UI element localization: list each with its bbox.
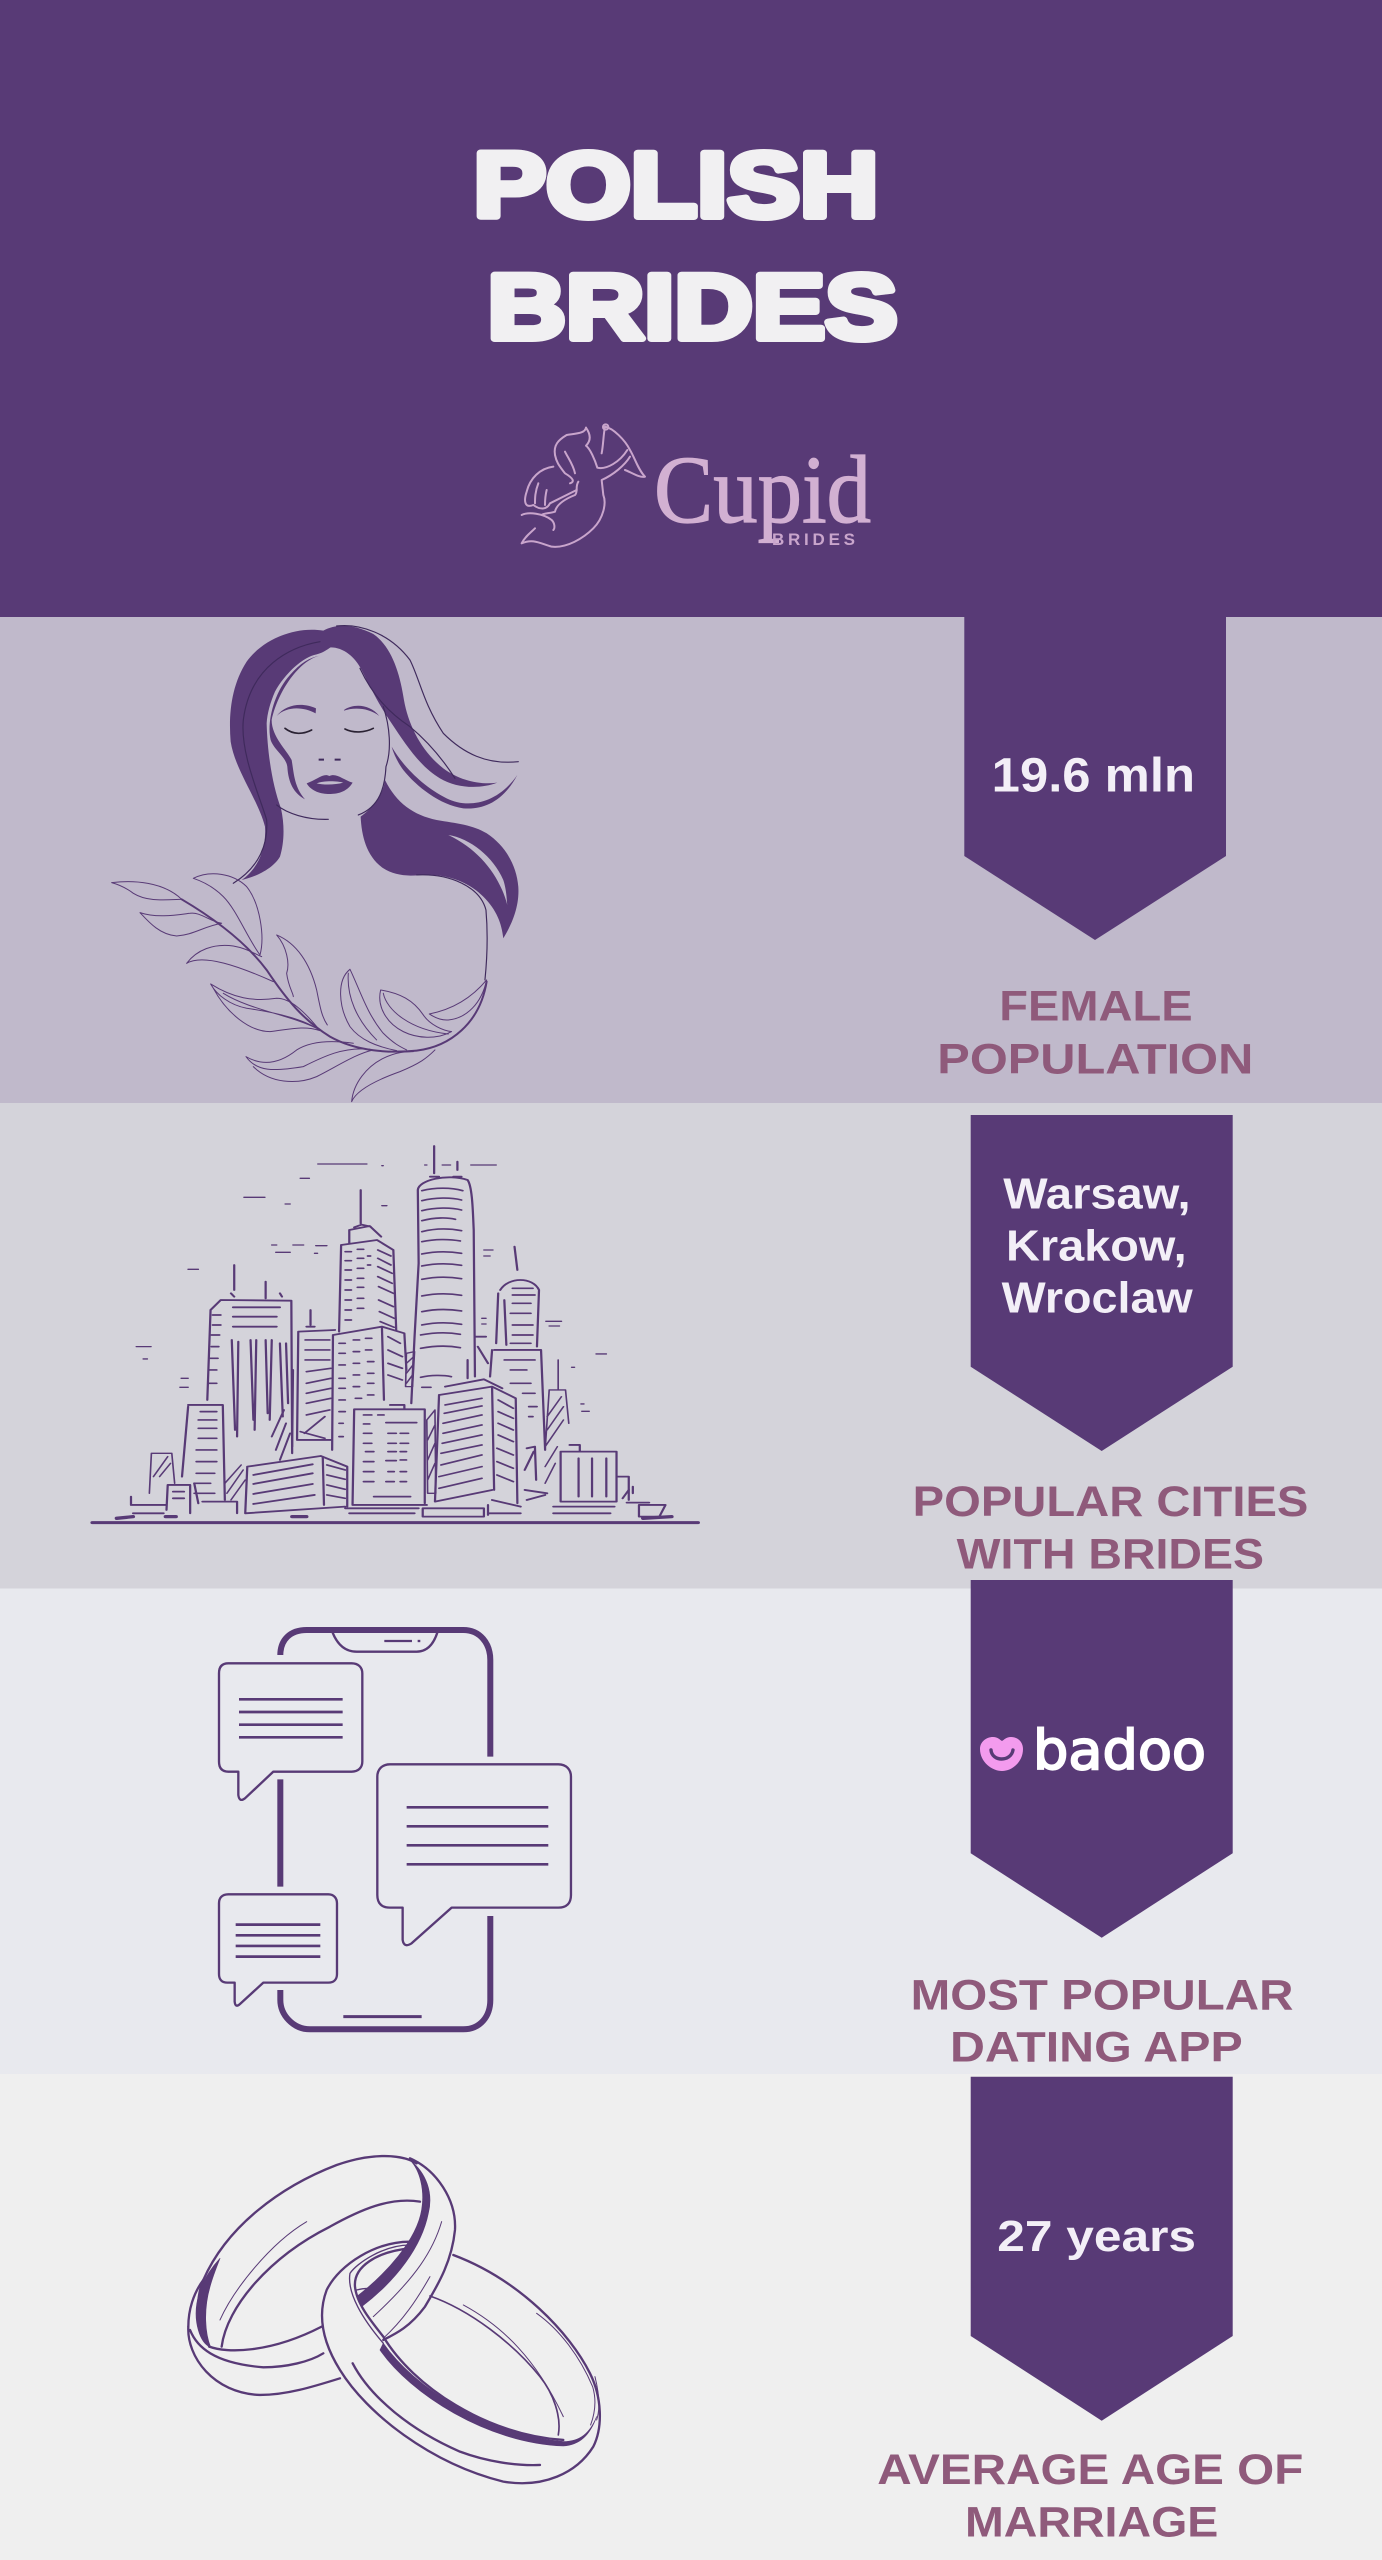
panel: female population bbox=[0, 617, 1382, 1103]
label: dating app: MOST POPULAR bbox=[911, 1971, 1293, 2019]
right low building bbox=[561, 1445, 629, 1502]
phone bbox=[280, 1630, 490, 2029]
title bbox=[474, 134, 898, 358]
illustration: city skyline bbox=[92, 1146, 698, 1523]
label: female population bbox=[937, 983, 1253, 1083]
banner: 27 years bbox=[971, 2077, 1233, 2421]
banner: cities: Wroclaw bbox=[1002, 1274, 1194, 1323]
mid block bbox=[332, 1327, 406, 1450]
ring 2 bbox=[322, 2242, 600, 2483]
badoo wordmark: badoo bbox=[1033, 1719, 1206, 1782]
mid low building bbox=[353, 1405, 427, 1505]
chat bubble 3 bbox=[219, 1894, 337, 2006]
panel: dating app bbox=[0, 1580, 1382, 2074]
icon: cupid bbox=[522, 424, 645, 547]
banner: cities bbox=[971, 1115, 1233, 1451]
label: dating app bbox=[911, 1971, 1293, 2072]
ring 1 bbox=[188, 2156, 455, 2395]
sky dashes bbox=[136, 1164, 606, 1411]
panel: header bbox=[0, 0, 1382, 617]
right tower bbox=[496, 1247, 539, 1347]
banner: 19.6 mln: 19.6 mln bbox=[992, 750, 1195, 803]
tall left building bbox=[207, 1265, 292, 1453]
low wide building bbox=[245, 1456, 347, 1513]
label: average age of marriage: AVERAGE AGE OF bbox=[877, 2446, 1303, 2494]
short left building bbox=[182, 1405, 225, 1500]
panel: average age of marriage bbox=[0, 2074, 1382, 2560]
hair strands and body lines bbox=[233, 626, 518, 980]
illustration: woman with leaves bbox=[112, 626, 518, 1102]
logo subtext: BRIDES bbox=[772, 530, 855, 549]
banner: 27 years: 27 years bbox=[997, 2212, 1196, 2261]
logo: Cupid Brides bbox=[522, 424, 871, 549]
chat bubble 2 bbox=[377, 1764, 571, 1945]
left block bbox=[297, 1310, 335, 1440]
right small tower bbox=[545, 1360, 569, 1483]
label: female population: POPULATION bbox=[937, 1035, 1253, 1083]
face bbox=[277, 705, 379, 794]
center tower bbox=[339, 1190, 396, 1332]
title: POLISH bbox=[474, 134, 878, 236]
label: popular cities: WITH BRIDES bbox=[957, 1531, 1264, 1579]
banner: cities: Krakow, bbox=[1006, 1222, 1187, 1271]
label: dating app: DATING APP bbox=[950, 2024, 1243, 2072]
logo wordmark: Cupid bbox=[654, 436, 871, 543]
icon: badoo heart bbox=[980, 1737, 1023, 1771]
label: female population: FEMALE bbox=[999, 983, 1193, 1031]
leaf branch bbox=[112, 874, 487, 1102]
label: popular cities: POPULAR CITIES bbox=[913, 1478, 1308, 1526]
banner: 19.6 mln bbox=[964, 617, 1226, 940]
label: average age of marriage: MARRIAGE bbox=[965, 2499, 1218, 2547]
banner: badoo bbox=[971, 1580, 1233, 1938]
chat bubble 1 bbox=[219, 1663, 362, 1800]
illustration: phone with chat bubbles bbox=[219, 1630, 571, 2029]
main tower bbox=[411, 1146, 475, 1403]
right mid building bbox=[435, 1360, 517, 1503]
label: popular cities bbox=[913, 1478, 1308, 1579]
label: average age of marriage bbox=[877, 2446, 1303, 2547]
panel: popular cities bbox=[0, 1103, 1382, 1589]
banner: cities: Warsaw, bbox=[1003, 1169, 1191, 1218]
illustration: wedding rings bbox=[188, 2156, 600, 2483]
hair bbox=[230, 626, 518, 938]
title: BRIDES bbox=[488, 256, 898, 358]
